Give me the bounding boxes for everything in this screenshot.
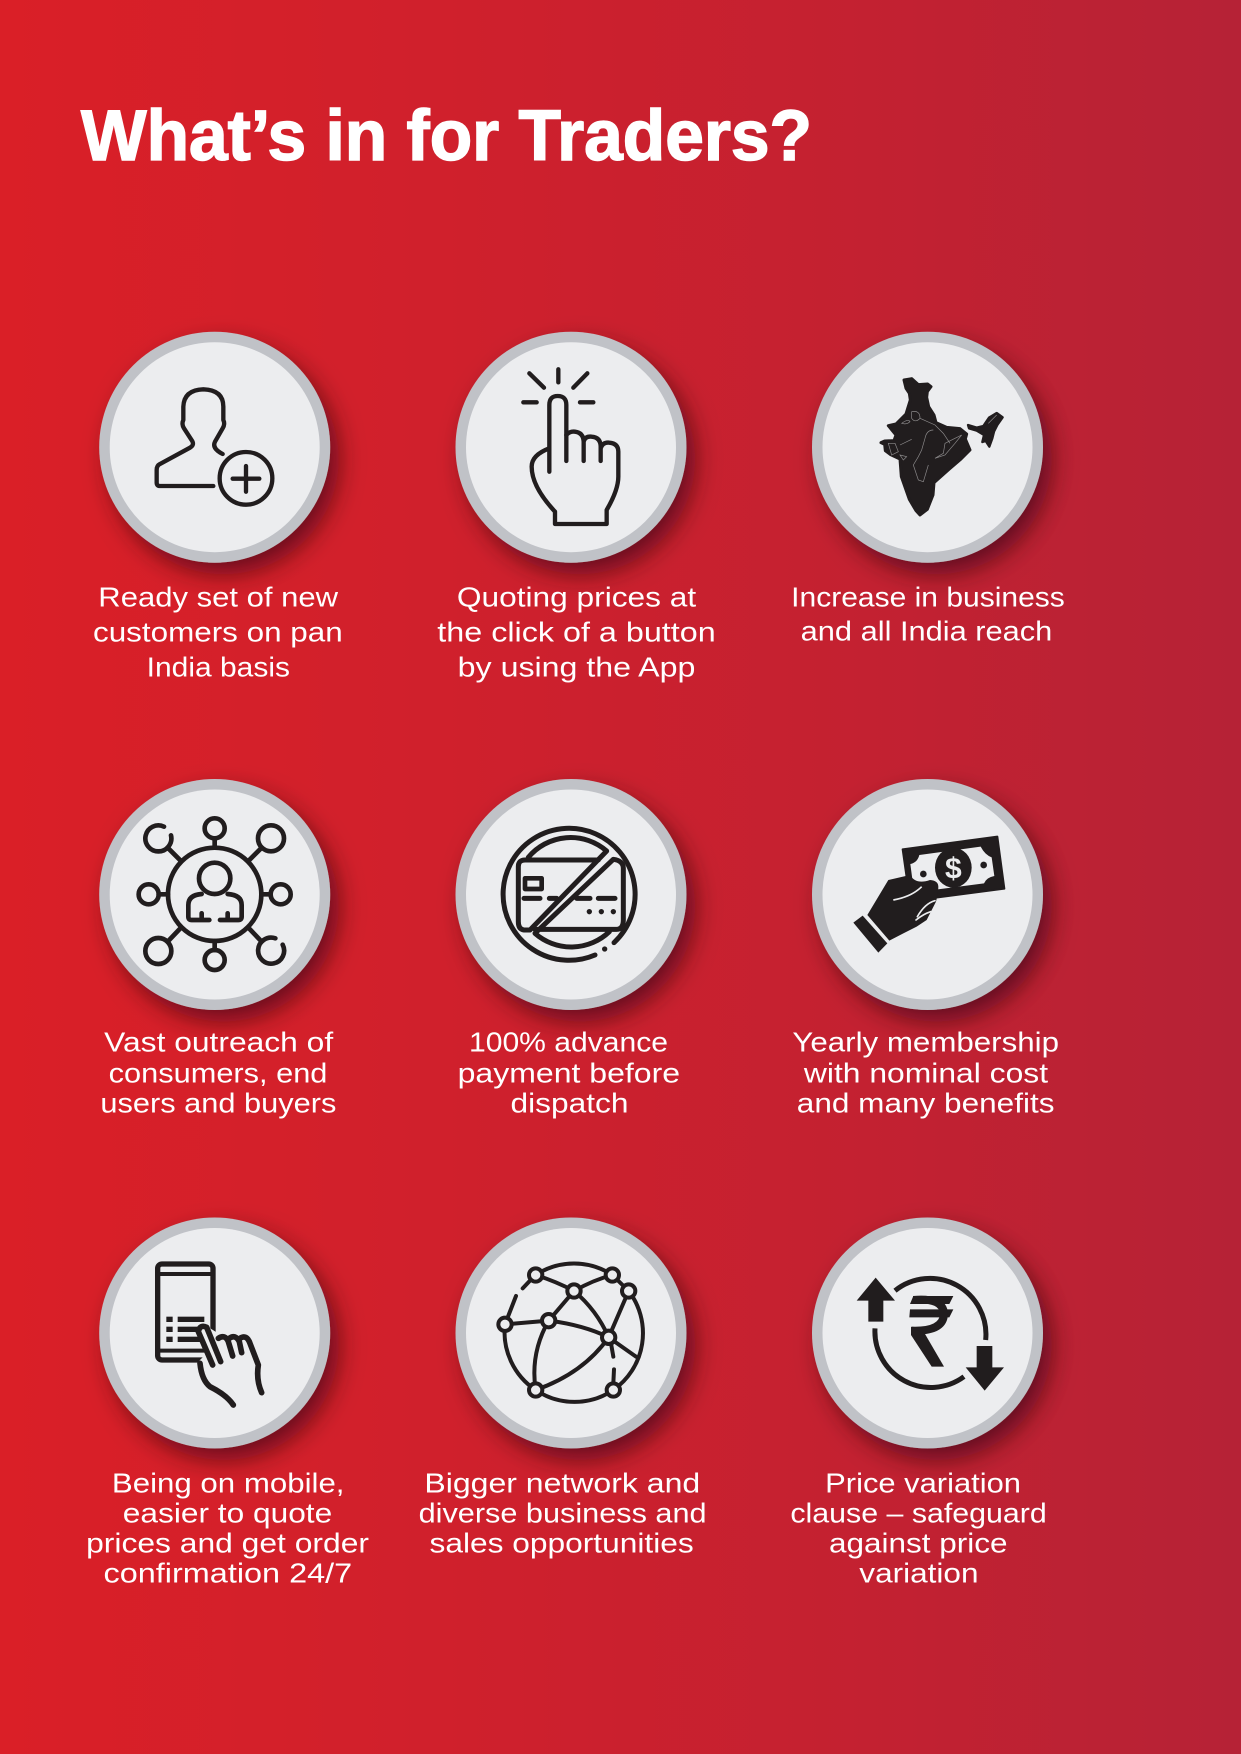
caption: diverse business and <box>419 1497 707 1528</box>
caption: Vast outreach of <box>104 1027 334 1058</box>
caption: against price <box>829 1527 1008 1558</box>
caption: dispatch <box>510 1087 628 1118</box>
caption: India basis <box>147 652 290 683</box>
badge circle <box>812 1218 1043 1448</box>
badge circle <box>456 332 686 563</box>
icon: globe network <box>498 1263 643 1402</box>
icon: no credit card <box>503 828 635 960</box>
caption <box>458 1027 680 1118</box>
caption <box>792 1027 1059 1118</box>
icon: add user <box>157 389 272 505</box>
caption: Quoting prices at <box>457 582 697 613</box>
caption: 100% advance <box>469 1027 668 1058</box>
icon: hand holding banknote: $ <box>945 852 962 885</box>
panel: all India reach <box>791 332 1065 647</box>
panel: quoting prices <box>437 332 716 683</box>
panel: vast outreach <box>99 779 336 1118</box>
icon: hand on smartphone <box>158 1264 262 1405</box>
caption: Yearly membership <box>792 1027 1059 1058</box>
panel: price variation <box>790 1218 1047 1588</box>
badge circle <box>812 332 1043 563</box>
icon: hand holding banknote <box>853 837 1004 953</box>
caption: variation <box>859 1557 978 1588</box>
caption: Price variation <box>825 1467 1021 1498</box>
caption: Bigger network and <box>424 1467 700 1498</box>
title: What’s in for Traders? <box>81 97 812 176</box>
caption <box>437 582 716 683</box>
panel: bigger network <box>419 1218 707 1558</box>
caption: the click of a button <box>437 617 716 648</box>
caption: consumers, end <box>109 1057 327 1088</box>
caption: Being on mobile, <box>112 1467 345 1498</box>
caption <box>86 1467 369 1588</box>
caption: confirmation 24/7 <box>104 1557 352 1588</box>
caption <box>93 582 343 683</box>
badge circle <box>456 779 686 1010</box>
icon: rupee with up and down arrows <box>857 1278 1004 1391</box>
caption: by using the App <box>458 652 695 683</box>
caption: Increase in business <box>791 582 1065 613</box>
icon: people network <box>139 818 291 970</box>
caption: easier to quote <box>123 1497 332 1528</box>
caption: with nominal cost <box>803 1057 1048 1088</box>
badge circle <box>456 1218 686 1448</box>
caption: sales opportunities <box>430 1527 694 1558</box>
caption: payment before <box>458 1057 680 1088</box>
panel: yearly membership <box>792 779 1059 1118</box>
caption: users and buyers <box>100 1087 336 1118</box>
caption: clause – safeguard <box>790 1497 1047 1528</box>
caption: and many benefits <box>797 1087 1054 1118</box>
caption <box>791 582 1065 647</box>
caption: and all India reach <box>801 616 1052 647</box>
caption <box>790 1467 1047 1588</box>
badge circle <box>99 332 330 563</box>
panel: on mobile <box>86 1218 369 1588</box>
caption <box>419 1467 707 1558</box>
caption: Ready set of new <box>98 582 338 613</box>
icon: India map <box>881 379 1003 515</box>
caption: prices and get order <box>86 1527 369 1558</box>
caption: customers on pan <box>93 617 343 648</box>
badge circle <box>99 1218 330 1448</box>
badge circle <box>812 779 1043 1010</box>
icon: tapping finger <box>523 369 618 524</box>
caption <box>100 1027 336 1118</box>
badge circle <box>99 779 330 1010</box>
panel: advance payment <box>456 779 686 1118</box>
panel: new customers <box>93 332 343 683</box>
